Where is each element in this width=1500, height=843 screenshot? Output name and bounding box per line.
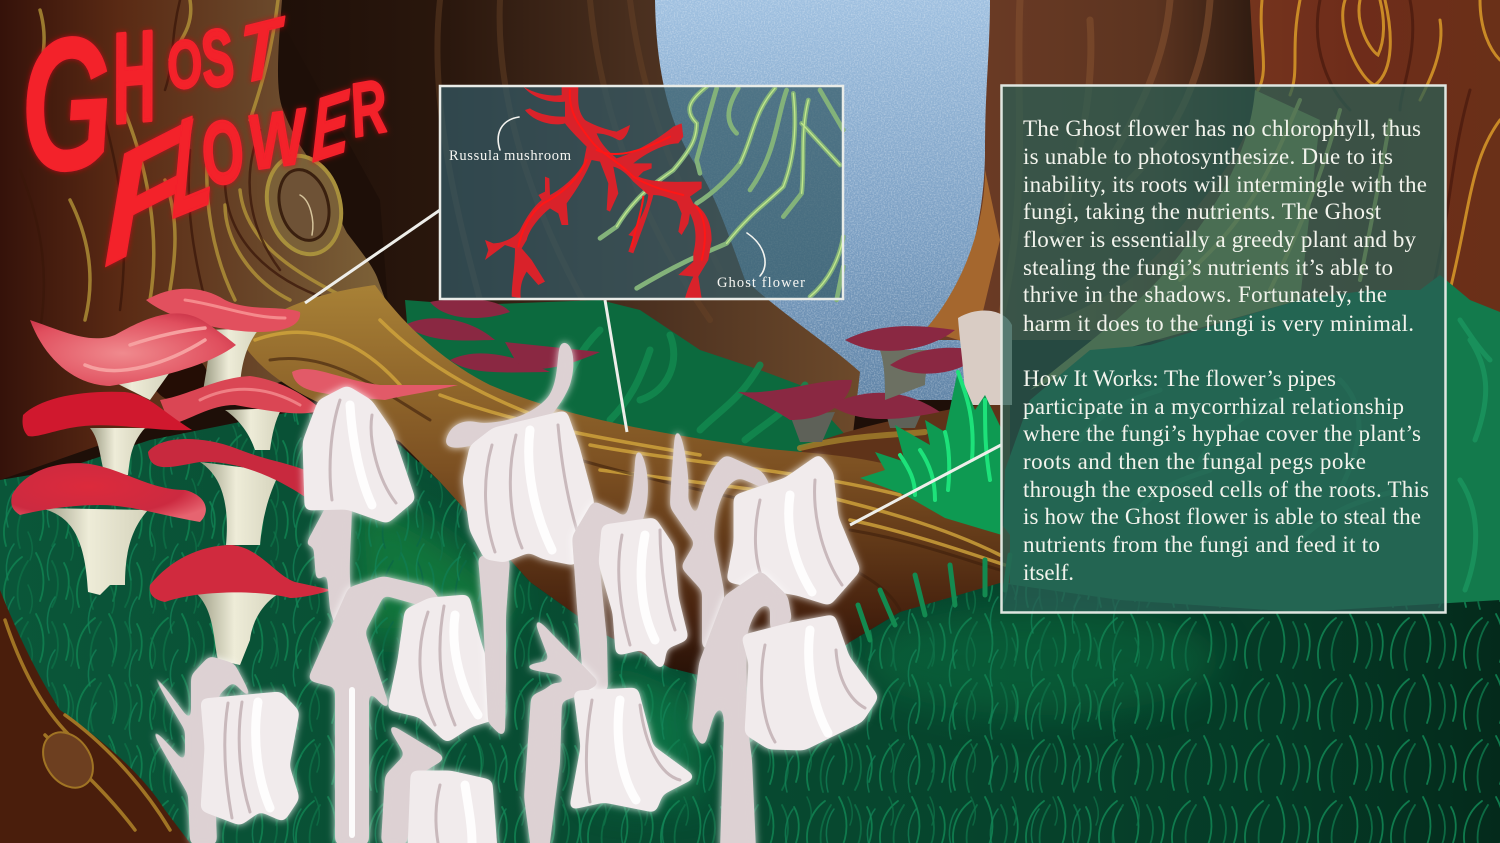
paragraph: description: inability, its roots will intermingle with the xyxy=(1023,172,1427,197)
mid bushes xyxy=(405,300,860,470)
paragraph: description: stealing the fungi’s nutrients it’s able to xyxy=(1023,255,1393,280)
label: Ghost flower: Ghost flower xyxy=(717,275,805,291)
flower B xyxy=(310,578,502,843)
grass texture xyxy=(0,395,1500,843)
paragraph: description: is unable to photosynthesize. Due to its xyxy=(1023,144,1393,169)
title: F xyxy=(103,86,194,300)
mushroom hyphae xyxy=(485,87,712,298)
mushroom: low left xyxy=(11,463,206,595)
title: R xyxy=(343,63,393,153)
title: O xyxy=(162,26,207,105)
hollow behind mushrooms xyxy=(152,354,208,402)
inset tinted background xyxy=(440,86,843,299)
text panel xyxy=(1002,86,1446,612)
inset panel: roots close-up xyxy=(440,86,843,300)
mushroom: bright red xyxy=(23,392,192,475)
title: E xyxy=(312,70,350,181)
mushroom: big pink xyxy=(30,313,236,400)
paragraph: how it works: nutrients from the fungi and feed it to xyxy=(1023,532,1380,557)
label: Russula mushroom: Russula mushroom xyxy=(449,148,572,164)
title: T xyxy=(240,0,285,101)
flower I xyxy=(526,620,692,843)
foreground grass xyxy=(0,410,1500,843)
label arc: Russula mushroom xyxy=(498,117,519,150)
mushrooms cluster xyxy=(11,289,458,665)
title: G xyxy=(15,0,118,213)
paragraph: how it works: roots and then the fungal pegs poke xyxy=(1023,449,1366,474)
flower E xyxy=(447,343,592,735)
title: S xyxy=(193,11,240,105)
mushroom: back top xyxy=(146,289,300,392)
title: W xyxy=(242,92,315,187)
flower F xyxy=(574,450,686,690)
paragraph: description: harm it does to the fungi is very minimal. xyxy=(1023,311,1414,336)
connector line: inset to log xyxy=(605,300,627,432)
flower C xyxy=(152,658,297,843)
paragraph: how it works: through the exposed cells of the roots. This xyxy=(1023,477,1429,502)
near right tree trunk xyxy=(1020,0,1500,390)
title: H xyxy=(106,5,162,151)
flower A xyxy=(305,388,413,640)
paragraph: how it works: is how the Ghost flower is able to steal the xyxy=(1023,504,1421,529)
title: O xyxy=(193,101,251,205)
mushroom: spike behind flower xyxy=(292,369,458,400)
far brown slope xyxy=(800,400,1010,490)
sky xyxy=(640,0,1010,400)
flower D xyxy=(383,726,495,843)
far ghost flower xyxy=(958,311,1012,405)
far centre tree trunk xyxy=(270,0,860,460)
paragraph: description: flower is essentially a greedy plant and by xyxy=(1023,227,1416,252)
ghost flower roots xyxy=(600,87,843,300)
mushroom: right middle xyxy=(160,376,322,450)
grass blades along log xyxy=(858,555,1010,640)
hyphae highlights xyxy=(518,90,705,260)
lighter grass highlights xyxy=(350,500,1220,800)
flower H xyxy=(694,573,876,843)
far right tree trunk xyxy=(925,0,1300,345)
title: L xyxy=(172,79,213,247)
far mushrooms xyxy=(405,299,980,442)
connector line: mushroom to inset xyxy=(305,210,440,303)
paragraph: how it works: where the fungi’s hyphae cover the plant’s xyxy=(1023,421,1421,446)
paragraph: how it works xyxy=(1023,366,1429,585)
paragraph: description: The Ghost flower has no chlorophyll, thus xyxy=(1023,116,1421,141)
paragraph: description xyxy=(1023,116,1427,336)
right background bush xyxy=(1000,275,1500,640)
paragraph: how it works: participate in a mycorrhizal relationship xyxy=(1023,394,1404,419)
label arc: Ghost flower xyxy=(747,233,765,276)
mushroom: middle xyxy=(148,439,305,545)
paragraph: description: fungi, taking the nutrients. The Ghost xyxy=(1023,199,1382,224)
title xyxy=(15,0,393,300)
mushroom: front xyxy=(150,545,332,665)
lower left tree root xyxy=(0,590,190,843)
paragraph: how it works: How It Works: The flower’s pipes xyxy=(1023,366,1336,391)
connector line: text panel to log xyxy=(850,445,1001,525)
tree knot xyxy=(256,147,352,263)
panel background xyxy=(1002,86,1446,612)
fallen log xyxy=(240,285,1010,695)
bright grass tuft xyxy=(860,370,1002,535)
ghost flowers group xyxy=(152,343,876,843)
left tree trunk xyxy=(0,0,400,480)
paragraph: description: thrive in the shadows. Fortunately, the xyxy=(1023,282,1387,307)
inset border xyxy=(440,86,843,299)
paragraph: how it works: itself. xyxy=(1023,560,1074,585)
flower G xyxy=(672,430,858,647)
